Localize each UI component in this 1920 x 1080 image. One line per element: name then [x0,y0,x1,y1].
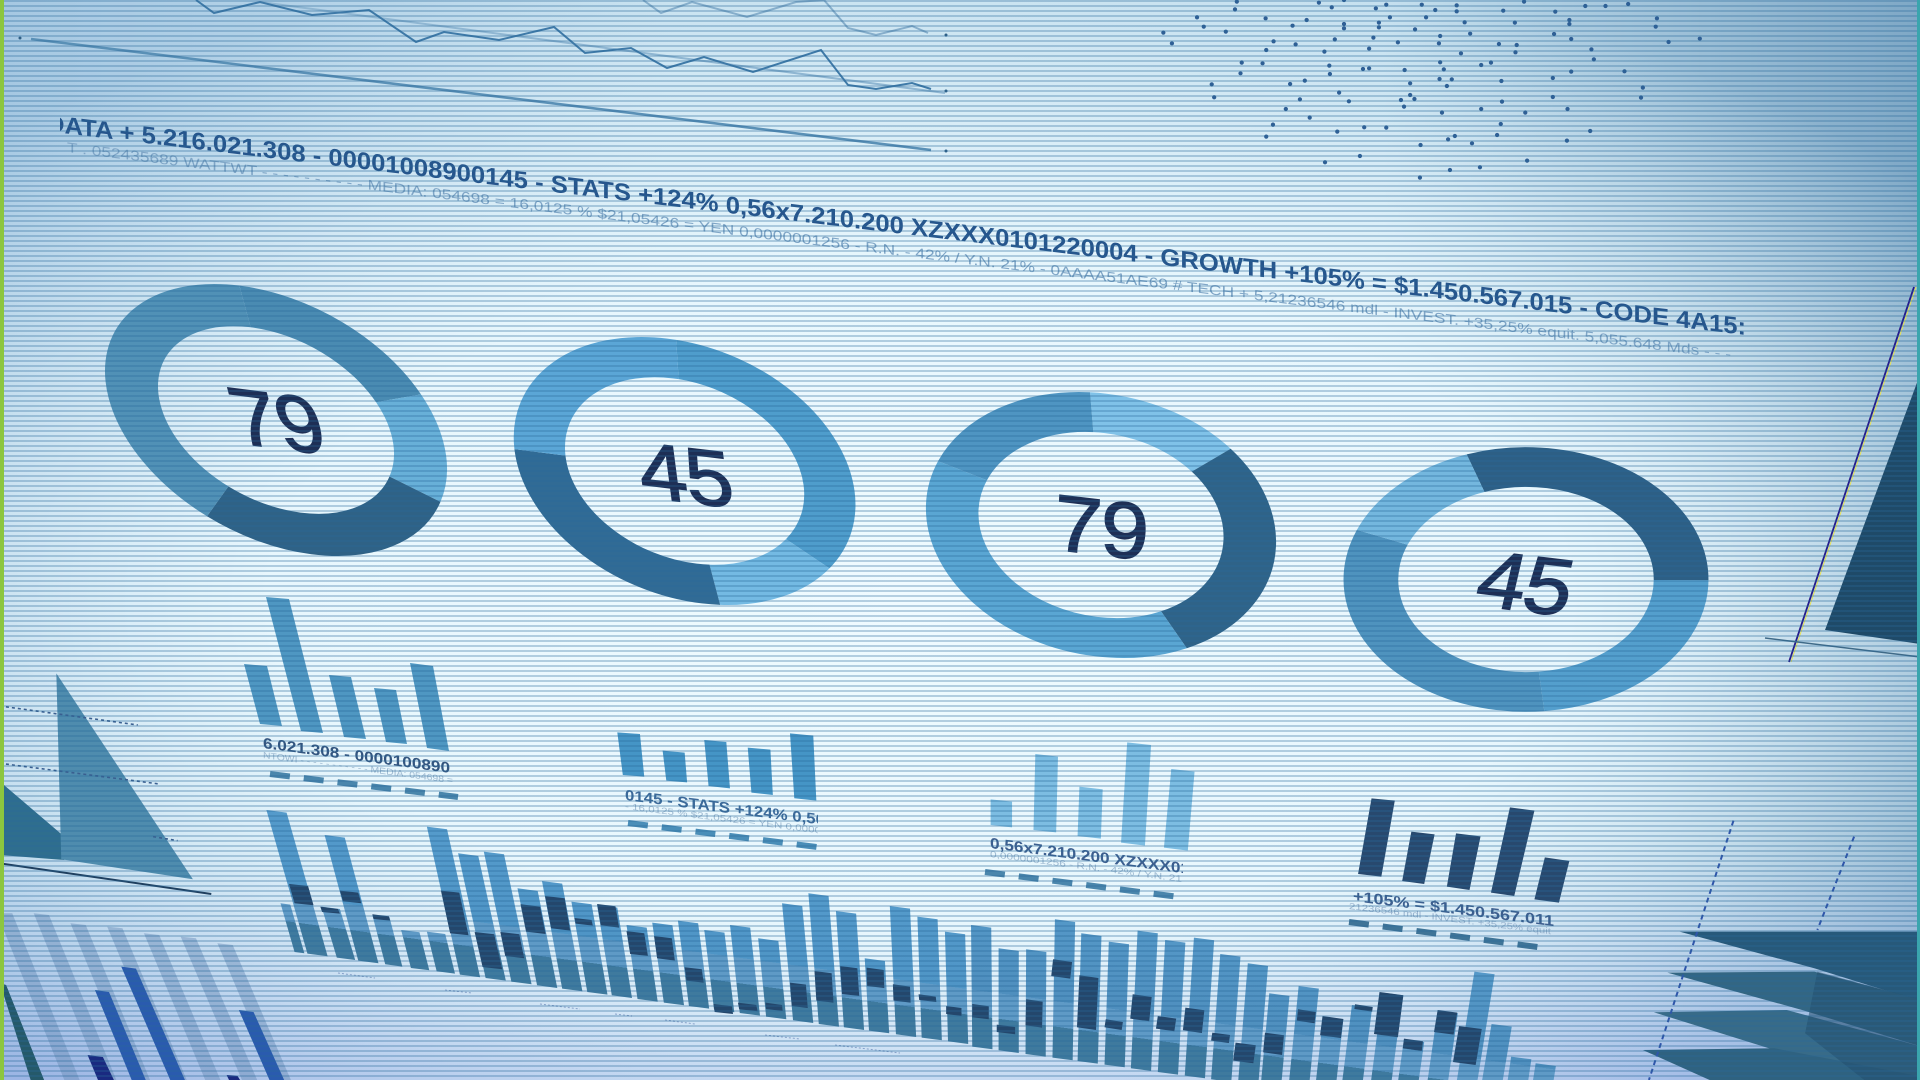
large bar chart: right part [971,919,1556,1080]
left edge colour fringe [0,0,4,1080]
scatter plot [1163,0,1700,178]
donut 3: 79 [947,396,1255,654]
small bar chart 1 [244,597,458,797]
ticker main line: DATA + 5.216.021.308 - 00001008900145 - STATS +124% 0,56x7.210.200 XZXXX0101220004 - GROWTH +105% = $1.450.567.015 - CODE 4A15: [46,110,1746,341]
value 79: 79 [1053,478,1149,578]
large bar chart: left part [266,810,968,1044]
chart 4 caption: +105% = $1.450.567.011 [1353,888,1554,930]
value 79: 79 [219,370,334,472]
small bar chart 3 [985,742,1195,897]
value 45: 45 [1469,533,1581,633]
donut 4: 45 [1348,450,1704,709]
donut 1: 79 [105,288,447,552]
chart 1 caption [264,738,452,782]
value 45: 45 [633,424,737,525]
chart 3 caption: 0,0000001256 - R.N. - 42% / Y.N. 21 [990,849,1182,884]
ticker text [46,110,1746,362]
donut 2: 45 [525,341,844,601]
axis labels under large bar chart [338,973,900,1053]
ticker secondary line: T . 052435689 WATTWT - - - - - - - - - - MEDIA: 054698 = 16,0125 % $21,05426 = YEN 0,0000001256 - R.N. - 42% / Y.N. 21% - 0AAAA51AE69 # TECH + 5,21236546 mdl - INVEST. +35,25% equit. 5,055.648 Mds - - - [67,139,1731,362]
small bar chart 4 [1349,798,1569,948]
line chart: top series [18,0,948,152]
small bar chart 2 [617,732,825,847]
chart 1 caption: 6.021.308 - 0000100890 [263,735,450,777]
chart 4 caption [1350,892,1554,934]
right edge colour fringe [1917,0,1920,1080]
chart 3 caption: 0,56x7.210.200 XZXXX01 [990,835,1190,878]
chart 2 caption: - 16,0125 % $21,05426 = YEN 0,0000 [625,801,821,835]
chart 1 caption: NTOWI - - - - - - - - - - - MEDIA: 054698 = [263,750,453,785]
triangle chart: upper right [1765,287,1920,662]
triangle chart: lower right [1643,821,1920,1080]
chart 4 caption: 21236546 mdl - INVEST. +35,25% equit [1349,901,1552,936]
chart 2 caption: 0145 - STATS +124% 0,56 [625,787,825,829]
triangle chart: left [0,673,211,894]
bar chart: bottom-left foreground [0,913,291,1080]
